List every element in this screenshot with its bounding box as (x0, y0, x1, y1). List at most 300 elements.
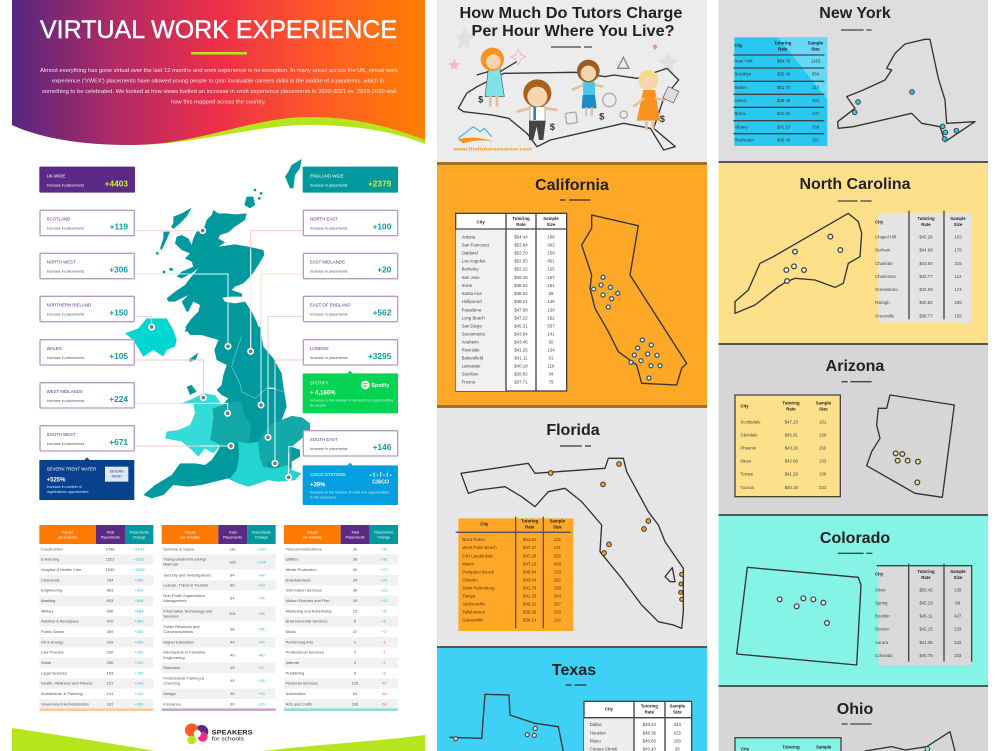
state map (582, 215, 687, 385)
card: East of England (303, 296, 398, 322)
table: $50.45 (919, 587, 933, 592)
table 3: Placements (374, 530, 393, 534)
table 2: +56 (258, 611, 265, 616)
table: Tutoring (917, 569, 935, 574)
table: $52.55 (514, 259, 528, 264)
main title: How Much Do Tutors Charge (460, 5, 683, 22)
table: Rate (921, 575, 931, 580)
table: $53.64 (514, 243, 528, 248)
card: Severn Trent Water: Increase in number of (47, 485, 83, 489)
table 3: +5 (382, 608, 387, 613)
card: Cisco Systems: CISCO (372, 479, 389, 485)
table 1: +361 (135, 629, 144, 634)
table 2: +44 (258, 639, 265, 644)
section: Ohio (718, 687, 988, 751)
table: 615 (674, 730, 682, 735)
heading: Arizona (826, 358, 884, 375)
table: Phoenix (740, 446, 757, 451)
card: North East: Increase in placements (310, 227, 348, 231)
card: East of England: EAST OF ENGLAND (310, 303, 351, 308)
table: $38.14 (523, 618, 537, 623)
table: Mesa (740, 458, 752, 463)
table 2: Design (163, 691, 176, 696)
table: $52.22 (514, 267, 528, 272)
table: Sample (950, 216, 966, 221)
card: East Midlands: +20 (377, 265, 392, 275)
card: East Midlands: EAST MIDLANDS (310, 260, 345, 265)
table: Tutoring (641, 704, 658, 709)
table: Size (811, 46, 820, 51)
card: East of England: +562 (373, 308, 392, 318)
table: Tampa (462, 594, 476, 599)
table 2: 84 (230, 596, 235, 601)
table 2: 45 (230, 665, 235, 670)
table: $42.77 (919, 274, 933, 279)
table: Denver (875, 627, 890, 632)
card: South East: +146 (373, 442, 392, 452)
table: Stockton (462, 372, 479, 377)
table: 61 (549, 355, 554, 360)
table: $46.83 (643, 738, 657, 743)
table: Aurora (875, 640, 889, 645)
table: Size (673, 710, 682, 715)
table: Size (954, 575, 963, 580)
table 2: Higher Education (163, 639, 194, 644)
table 1: +1535 (133, 567, 145, 572)
table: 108 (547, 235, 555, 240)
table: 1163 (811, 59, 821, 64)
table: $42.08 (919, 287, 933, 292)
card: Severn Trent Water: TRENT (111, 474, 122, 478)
table: $48.54 (514, 291, 528, 296)
table 1: Placements (129, 530, 149, 534)
table: Boulder (875, 614, 890, 619)
table: 150 (819, 432, 827, 437)
intro paragraph (40, 68, 398, 106)
table: $41.76 (523, 586, 537, 591)
site logo (452, 127, 532, 152)
table 3: 30 (353, 546, 358, 551)
table: $43.46 (514, 339, 528, 344)
table: Size (547, 222, 556, 227)
table: Scottsdale (740, 419, 761, 424)
card: UK-wide: +4403 (105, 178, 128, 188)
table 1: +139 (135, 701, 144, 706)
card: Wales: +105 (109, 351, 128, 361)
state map (735, 213, 862, 313)
table 1: +250 (135, 650, 144, 655)
table: Sample (670, 704, 686, 709)
tutor 2 (517, 79, 558, 140)
table 1: Retail (41, 660, 51, 665)
Speakers for Schools logo: for schools (212, 737, 244, 743)
table: $54.44 (514, 235, 528, 240)
table 1: 1038 (106, 546, 115, 551)
table: Hollywood (462, 299, 482, 304)
table: 103 (954, 235, 962, 240)
table: Size (819, 407, 828, 412)
table 3: 6 (354, 670, 357, 675)
table: City (734, 43, 743, 48)
heading: Ohio (837, 701, 873, 718)
table: $43.29 (785, 446, 799, 451)
table 2: Placements (223, 535, 242, 539)
table 1: Places (62, 530, 73, 534)
table 1: +149 (135, 681, 144, 686)
table: $45.19 (919, 601, 933, 606)
card: London: Increase in placements (310, 356, 348, 360)
footer wave: right (263, 735, 425, 751)
card: North West (40, 253, 134, 279)
table 2: Change (255, 535, 268, 539)
card: London: +3295 (368, 351, 392, 361)
table 1: 1523 (106, 557, 115, 562)
table: Silver (875, 587, 886, 592)
panel: virtual work experience (12, 0, 425, 751)
table: Rate (516, 222, 526, 227)
card: England-wide: Increase in placements (310, 183, 348, 187)
table: 133 (954, 627, 962, 632)
panel: tutors column two (718, 0, 988, 751)
uk map section (39, 167, 398, 505)
card: South East (303, 431, 398, 456)
table 2 (162, 525, 276, 711)
table: Antoria (462, 235, 476, 240)
table: Charlotte (875, 261, 893, 266)
table: $48.36 (643, 730, 657, 735)
table: $40.82 (919, 300, 933, 305)
table 3: 2 (354, 650, 357, 655)
table 1: Chemicals (41, 577, 60, 582)
table: $41.25 (514, 347, 528, 352)
table 1: +402 (135, 619, 144, 624)
table 2: Coaching (163, 681, 180, 686)
table: 146 (547, 299, 555, 304)
Speakers for Schools logo (185, 723, 253, 744)
table: Santa Ana (462, 291, 482, 296)
table: Sample (550, 519, 566, 524)
table: City (740, 404, 749, 409)
card: Severn Trent Water: SEVERN TRENT WATER (47, 467, 96, 472)
table: Rate (786, 407, 796, 412)
table 2: Defense & Space (163, 546, 195, 551)
table: $41.29 (785, 472, 799, 477)
table: 125 (547, 267, 555, 272)
table (584, 701, 692, 751)
card: Northern Ireland: Increase in placements (47, 313, 84, 317)
table: Pasadena (462, 307, 482, 312)
table 2: 58 (230, 627, 235, 632)
table 3: Entertainment (286, 577, 311, 582)
card: Spotify: SPOTIFY (310, 381, 329, 386)
table: Tutoring (774, 40, 792, 45)
table: 343 (674, 722, 682, 727)
table 2: 45 (230, 678, 235, 683)
table: 150 (674, 738, 682, 743)
table: 117 (812, 85, 820, 90)
card: Cisco Systems: in the local area (310, 495, 337, 499)
tutor 1 (477, 48, 517, 107)
table: Glendale (740, 432, 758, 437)
title: VIRTUAL WORK EXPERIENCE (40, 16, 397, 44)
table: 302 (547, 243, 555, 248)
table: $40.21 (523, 602, 537, 607)
table 3: per Industry (303, 535, 322, 539)
table 2: Total (229, 530, 237, 534)
card: Spotify (303, 371, 398, 413)
table: 297 (554, 602, 562, 607)
table: Durham (875, 248, 891, 253)
card: West Midlands: Increase in placements (47, 399, 84, 403)
intro paragraph: something to be celebrated. We looked at how views fuelled an increase in work experience placements in 2020-2021 vs. 2019-2020 and (42, 89, 396, 95)
table: Sample (543, 216, 559, 221)
card: Cisco Systems: CISCO SYSTEMS (310, 472, 346, 477)
table 1: 470 (107, 619, 114, 624)
table: $45.46 (777, 138, 791, 143)
table: West Palm Beach (462, 545, 497, 550)
table: Brooklyn (734, 72, 752, 77)
table 1: +299 (135, 639, 144, 644)
table 1: 181 (107, 701, 114, 706)
table: $38.77 (919, 313, 933, 318)
card: Wales: WALES (47, 346, 62, 351)
table: 294 (554, 594, 562, 599)
table 3: Internet (286, 660, 300, 665)
table: 28 (549, 291, 554, 296)
table: 256 (554, 553, 562, 558)
table 1: 299 (107, 639, 114, 644)
card: Northern Ireland: NORTHERN IRELAND (47, 303, 91, 308)
table: $37.71 (514, 380, 528, 385)
table: 158 (954, 313, 962, 318)
table: 106 (819, 472, 827, 477)
table: $48.43 (643, 722, 657, 727)
table 2: Professional Training & (163, 676, 205, 681)
table: 34 (549, 372, 554, 377)
intro paragraph: how this mapped across the country. (171, 100, 266, 106)
table: $47.28 (523, 553, 537, 558)
card: South West: +671 (109, 437, 128, 447)
table (733, 37, 827, 146)
table 3: +30 (381, 557, 388, 562)
table 3: 120 (352, 681, 359, 686)
table: 260 (819, 446, 827, 451)
card: West Midlands: +224 (109, 394, 128, 404)
table: 130 (547, 307, 555, 312)
table 3: 4 (354, 660, 357, 665)
table 3: -47 (381, 681, 388, 686)
table 2: 105 (229, 559, 236, 564)
table (875, 564, 972, 665)
table 2: +56 (258, 627, 265, 632)
table: $42.15 (919, 627, 933, 632)
state map (867, 395, 954, 497)
table 2: +35 (258, 678, 265, 683)
heading: Florida (546, 422, 600, 439)
table 3: 36 (353, 557, 358, 562)
Speakers for Schools logo: SPEAKERS (212, 729, 253, 736)
table: Tallahassee (462, 610, 486, 615)
table (456, 517, 573, 631)
table 2: +76 (258, 596, 265, 601)
card: London: LONDON (310, 346, 329, 351)
table 3: +15 (381, 598, 388, 603)
card: Northern Ireland (40, 296, 134, 322)
table 3: 38 (353, 588, 358, 593)
card: Severn Trent Water: +525% (47, 477, 66, 483)
card: South West (40, 426, 134, 451)
table: 233 (819, 485, 827, 490)
table 1: Banking (41, 598, 55, 603)
table 1: Aviation & Aerospace (41, 619, 80, 624)
table: Tutoring (782, 401, 800, 406)
table 3: Change (377, 535, 390, 539)
site logo: www.findtutorsnearme.com (452, 147, 532, 152)
table 1: 250 (107, 660, 114, 665)
table: 112 (955, 274, 962, 279)
table 2: Research (163, 665, 180, 670)
table: Orlando (462, 578, 478, 583)
table: Tempe (740, 472, 754, 477)
table 3: 1 (354, 639, 357, 644)
table 1: Government Administration (41, 701, 89, 706)
card: Scotland: +119 (110, 222, 128, 232)
table 1: Total (106, 530, 114, 534)
table: Charleston (875, 274, 897, 279)
placements per industry tables (39, 525, 398, 744)
table: $47.10 (523, 561, 537, 566)
table: 50 (549, 339, 554, 344)
table 3: Publishing (286, 670, 304, 675)
table: Rate (778, 46, 788, 51)
table: $45.28 (919, 235, 933, 240)
card: West Midlands (40, 383, 134, 408)
table: 130 (554, 610, 562, 615)
table 3: +30 (381, 546, 388, 551)
table 3: Media Production (286, 567, 317, 572)
table 2: 30 (230, 701, 235, 706)
table 3: +3 (382, 629, 387, 634)
table: 133 (554, 569, 562, 574)
table 2: Railroad (163, 562, 178, 567)
table: $42.66 (785, 458, 799, 463)
table 2: Public Relations and (163, 624, 200, 629)
table 2: Information Technology and (163, 608, 212, 613)
table: $39.82 (514, 372, 528, 377)
table: $49.48 (777, 98, 791, 103)
table 1: 369 (107, 629, 114, 634)
table: $39.29 (523, 610, 537, 615)
table 1: 1535 (106, 567, 115, 572)
table: City (480, 522, 489, 527)
table 2: Insurance (163, 701, 182, 706)
table 2: 40 (230, 652, 235, 657)
table 1: +654 (135, 608, 144, 613)
table 2: Mechanical or Industrial (163, 650, 206, 655)
table 2: 84 (230, 572, 235, 577)
table 3: Environmental Services (286, 619, 328, 624)
table 1: 141 (107, 691, 114, 696)
table 1: +141 (135, 691, 144, 696)
decorative stars and shapes: $ (599, 111, 605, 121)
table: Sample (816, 401, 832, 406)
card: North East: +100 (373, 222, 392, 232)
main title (460, 6, 682, 36)
intro paragraph: experience ('VWEX') placements have allowed young people to gain invaluable careers skills in the middle of a pandemic, which is (52, 78, 384, 84)
illustration: US map with tutors (449, 25, 679, 152)
table 1: +1034 (133, 546, 145, 551)
table: Anaheim (462, 339, 479, 344)
table: Raleigh (875, 300, 890, 305)
table: 121 (554, 545, 562, 550)
table: 139 (954, 587, 962, 592)
table: 162 (547, 315, 555, 320)
table: San Diego (462, 323, 482, 328)
table 1: 250 (107, 650, 114, 655)
table 3: 30 (353, 567, 358, 572)
connector lines (135, 231, 303, 477)
table (735, 395, 842, 498)
table 1: E-learning (41, 557, 59, 562)
table 3: +27 (381, 567, 388, 572)
table: Tutoring (782, 744, 800, 749)
table 2: +84 (258, 572, 265, 577)
table: $41.10 (777, 125, 791, 130)
table 1 (39, 525, 153, 711)
table: 262 (554, 578, 562, 583)
table: Rochester (734, 138, 755, 143)
table: 101 (819, 419, 827, 424)
table: Staten (734, 85, 747, 90)
table 2: 204 (229, 611, 236, 616)
card: England-wide: +2379 (368, 178, 392, 188)
table 2: Places (185, 530, 196, 534)
table: $43.84 (514, 331, 528, 336)
table 3: -4 (382, 660, 387, 665)
state map (737, 567, 861, 665)
decorative stars and shapes (449, 25, 678, 132)
table: 79 (549, 380, 554, 385)
tutor 4 (633, 70, 679, 130)
heading: California (535, 177, 609, 194)
tutor 3 (572, 60, 603, 116)
map markers (149, 228, 291, 480)
table: Bronx (734, 111, 746, 116)
table 1: Construction (41, 546, 63, 551)
card: East of England: Increase in placements (310, 313, 348, 317)
table: Greensboro (875, 287, 898, 292)
table: $40.16 (785, 485, 799, 490)
table 3: Professional Services (286, 650, 324, 655)
table: $41.33 (523, 594, 537, 599)
table 3: Automotive (286, 691, 306, 696)
table 3: 47 (353, 629, 358, 634)
table 3: Placements (345, 535, 365, 539)
card: Severn Trent Water: registrations opportunities (47, 490, 89, 494)
table: City (477, 219, 485, 224)
table: Berkeley (462, 267, 479, 272)
card: North West: +306 (109, 265, 128, 275)
table: Tutoring (521, 519, 539, 524)
table: Rate (921, 222, 931, 227)
table 1: Hospital & Health Care (41, 567, 82, 572)
table: Miami (462, 561, 474, 566)
table 2: 30 (230, 691, 235, 696)
table: $51.70 (777, 85, 791, 90)
table: Fort Lauderdale (462, 553, 493, 558)
card: Scotland: SCOTLAND (47, 217, 70, 222)
panel: tutors column one (437, 0, 707, 751)
